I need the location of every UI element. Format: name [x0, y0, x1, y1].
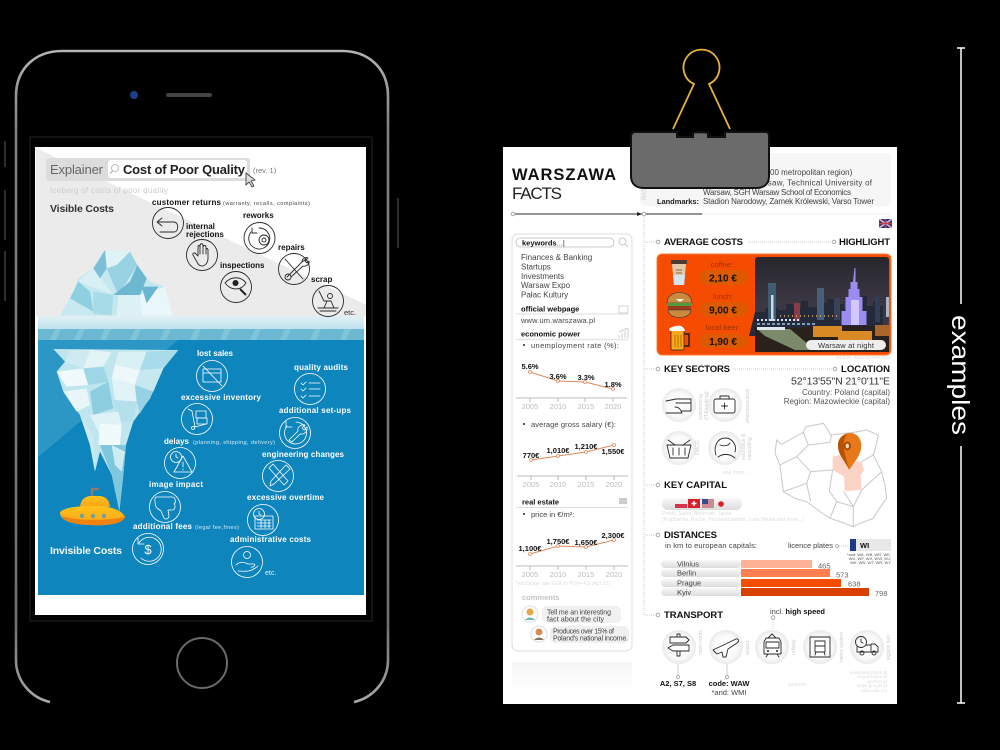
icon: delays — [164, 448, 196, 478]
row: berlin — [661, 568, 849, 580]
sources label: sources: — [788, 682, 807, 688]
coffee price: coffee: — [711, 260, 733, 269]
keyword list: Investments — [521, 272, 564, 281]
header bar — [46, 158, 250, 181]
icon: excessive overtime — [248, 504, 278, 536]
chart: unemployment rate: 3.3% — [577, 373, 595, 382]
icon: metro system — [803, 630, 837, 664]
chart: average gross salary: 1,210€ — [575, 442, 598, 451]
chart: unemployment rate: 1.8% — [604, 380, 622, 389]
heading: distances — [645, 530, 757, 550]
comment one: Tell me an interesting — [547, 610, 611, 616]
basic info panel: Stadion Narodowy, Zamek Królewski, Varso Tower — [703, 197, 874, 206]
title — [512, 166, 616, 203]
flags pill — [662, 498, 742, 510]
screen bezel — [30, 137, 372, 621]
chart: average gross salary — [517, 420, 628, 489]
heading: average costs: AVERAGE COSTS — [664, 237, 743, 248]
photo source: source: www.pexels.com — [836, 355, 891, 361]
roads value: A2, S7, S8 — [660, 679, 696, 688]
label: additional set-ups: additional set-ups — [279, 406, 352, 415]
heading: average costs — [645, 237, 836, 248]
revision note: (rev. 1) — [253, 166, 277, 175]
icon: additional fees — [132, 534, 164, 564]
phone mockup — [5, 51, 398, 702]
capital notes: (Polpharma, Roche, Procter&Gamble, Lotte Wedel and more...) — [662, 517, 804, 523]
label: lost sales: lost sales — [197, 349, 234, 358]
icon: coffee cup — [671, 260, 687, 285]
chart: average gross salary: 2020 — [606, 480, 622, 489]
label: main roads: main roads — [698, 630, 704, 655]
airport value — [709, 679, 750, 697]
photo: warsaw at night — [749, 257, 889, 352]
chart: price per square metre: 2020 — [606, 570, 622, 579]
comment two: Poland's national income. — [553, 636, 628, 642]
source list: bankier.pl — [868, 679, 887, 684]
label: insurance: insurance & — [741, 433, 747, 460]
label: insurance: consulting — [747, 437, 753, 460]
label: additional fees: additional fees — [133, 522, 193, 531]
keyword list: Pałac Kultury — [521, 290, 568, 300]
licence plates: WU, WF, WH, WW, WJ, — [849, 556, 891, 561]
label: repairs: repairs — [278, 243, 305, 252]
icon: airport — [709, 630, 743, 664]
palace of culture — [842, 268, 866, 325]
label: logistic hub: logistic hub — [886, 635, 892, 660]
licence plates: WI — [860, 541, 869, 550]
chart: average gross salary: 770€ — [523, 451, 540, 460]
label: outsourcing: (IT&banking) — [704, 391, 710, 420]
chart: price per square metre: 1,100€ — [519, 544, 542, 553]
binder clip — [631, 50, 769, 188]
lunch price — [700, 292, 747, 317]
comment one — [522, 606, 621, 624]
chart: unemployment rate: 2010 — [550, 402, 566, 411]
label: invisible costs: Invisible Costs — [50, 545, 122, 557]
airport value: code: WAW — [709, 679, 750, 688]
label: reworks: reworks — [243, 211, 274, 220]
chart: average gross salary: 1,010€ — [547, 446, 570, 455]
icon: pharmaceutical — [708, 388, 742, 422]
exchange rate footnote: *exchange rate EUR to PLN= 4,5 (Apr 22) — [516, 581, 610, 587]
chart: average gross salary: 2010 — [550, 480, 566, 489]
iceberg above water — [60, 250, 173, 316]
icon: additional set-ups — [280, 418, 310, 448]
note: additional fees: (legal fee,fines) — [195, 525, 239, 531]
home button — [177, 638, 227, 688]
chart: average gross salary: 2005 — [523, 480, 539, 489]
panel: average costs — [657, 254, 891, 355]
chart: price per square metre: price in €/m²: — [531, 510, 574, 519]
label: engineering changes: engineering changes — [262, 450, 345, 459]
coffee price: 2,10 € — [709, 274, 737, 284]
icon: image impact — [150, 492, 180, 522]
speaker — [168, 93, 210, 97]
chart: price per square metre: 2,300€ — [602, 531, 625, 540]
icon: burger — [667, 292, 692, 318]
row: vilnius: 465 — [818, 562, 831, 570]
chart: average gross salary: 1,550€ — [602, 447, 625, 456]
icon: beer mug — [669, 326, 689, 350]
icon: logistic hub — [850, 630, 884, 664]
chart: unemployment rate: 2015 — [578, 402, 594, 411]
official webpage: official webpage — [521, 304, 579, 314]
basic info panel: University of Warsaw, Technical University of — [703, 178, 873, 188]
faint lower box — [512, 662, 632, 690]
panel: location — [784, 364, 890, 406]
heading: distances: DISTANCES — [664, 530, 717, 541]
chart: price per square metre: 1,650€ — [575, 538, 598, 547]
label: outsourcing: outsourcing — [698, 394, 704, 420]
panel: warszawa facts sheet — [503, 147, 897, 704]
beer price: local beer: — [706, 323, 740, 332]
heading: highlight: HIGHLIGHT — [839, 237, 890, 248]
clip body — [631, 132, 769, 188]
icon: outsourcing — [662, 388, 696, 422]
side label: examples — [946, 48, 974, 703]
icon: additional fees: $ — [144, 542, 152, 557]
label: quality audits: quality audits — [294, 363, 349, 372]
side buttons — [5, 141, 398, 301]
search bar: keywords...| — [522, 238, 565, 248]
label: metro system: metro system — [839, 632, 845, 662]
keyword list: Startups — [521, 262, 551, 272]
title: FACTS — [512, 184, 562, 203]
label: excessive overtime: excessive overtime — [247, 493, 325, 502]
icon: customer returns — [152, 208, 184, 238]
submarine — [60, 489, 125, 525]
row: kyiv: Kyiv — [677, 588, 691, 597]
high speed note: incl. high speed — [770, 607, 825, 616]
airport value: *and: WMI — [711, 688, 747, 697]
lunch price: 9,00 € — [709, 306, 737, 316]
licence plates: *and: WA, WB, WD, WE, — [847, 552, 891, 557]
capital notes — [662, 511, 804, 523]
label: administrative costs: administrative costs — [230, 535, 312, 544]
icon: engineering changes — [262, 460, 294, 492]
beer price: 1,90 € — [709, 337, 737, 348]
row: prague: 638 — [848, 580, 861, 588]
chart: price per square metre: 2005 — [522, 570, 538, 579]
icon: administrative costs — [232, 546, 262, 578]
icon: reworks — [244, 222, 275, 254]
icon: fmcg basket — [662, 431, 696, 465]
label: fmcg: FMCG — [695, 440, 701, 455]
panel: location: Region: Mazowieckie (capital) — [784, 397, 890, 406]
icon: lost sales — [196, 360, 228, 392]
real estate heading: real estate — [522, 498, 559, 506]
note: customer returns: (warranty, recalls, complaints) — [223, 201, 310, 207]
label: delays: delays — [164, 437, 190, 446]
connector: airport — [726, 664, 728, 678]
licence plates: WK, WN, WT, WR, WY — [850, 560, 891, 565]
chart: price per square metre: 2010 — [550, 570, 566, 579]
row: prague: Prague — [677, 578, 701, 588]
chart: unemployment rate: 2005 — [522, 402, 538, 411]
row: vilnius: Vilnius — [677, 560, 699, 568]
basic info panel: 00 metropolitan region) — [770, 168, 853, 177]
panel: location: Country: Poland (capital) — [802, 388, 890, 397]
icon: railway — [755, 630, 789, 664]
panel: left column — [512, 234, 632, 651]
label: pharmaceutical: pharmaceutical — [745, 389, 751, 423]
label: airport: airport — [745, 640, 751, 655]
location pin — [838, 433, 861, 470]
icon: excessive inventory — [182, 404, 212, 434]
water surface — [38, 316, 364, 329]
official webpage — [516, 304, 628, 325]
visible costs background — [36, 148, 366, 316]
chart: unemployment rate — [516, 341, 627, 411]
comment two: Produces over 15% of — [553, 628, 614, 636]
row: kyiv — [661, 588, 888, 598]
lunch price: lunch: — [713, 292, 733, 301]
chart: price per square metre: 1,750€ — [547, 537, 570, 546]
panel: iceberg explainer screen — [35, 147, 366, 615]
chart: average gross salary: average gross salary (€): — [531, 420, 616, 429]
and more note: and more... — [723, 470, 748, 476]
chart: price per square metre: 2015 — [578, 570, 594, 579]
subtitle: Iceberg of costs of poor quality — [50, 186, 168, 195]
water stripes band — [38, 329, 364, 340]
chart: unemployment rate: 3.6% — [549, 372, 567, 381]
icon: quality audits — [294, 374, 326, 404]
clip wire — [673, 50, 730, 129]
etc visible: etc. — [344, 308, 356, 317]
source list: wikipedia.org — [861, 688, 887, 693]
heading: key capital: KEY CAPITAL — [664, 480, 727, 491]
chart: unemployment rate: 2020 — [605, 402, 621, 411]
label: customer returns: customer returns — [152, 198, 222, 207]
economic power heading: economic power — [521, 330, 580, 338]
source list: polskawliczbach.pl — [850, 670, 887, 675]
panel: location: 52°13'55"N 21°0'11"E — [791, 376, 890, 388]
icon: inspections — [220, 272, 252, 302]
mazowieckie region — [833, 455, 864, 491]
high speed note — [770, 607, 825, 629]
economic power heading — [516, 328, 628, 340]
icon: internal rejections — [186, 240, 218, 270]
heading: key sectors: KEY SECTORS — [664, 364, 730, 375]
label: excessive inventory: excessive inventory — [181, 393, 262, 402]
cursor — [246, 173, 255, 187]
title: WARSZAWA — [512, 166, 616, 184]
licence plates: licence plates — [788, 541, 833, 550]
map: poland — [775, 423, 887, 527]
city lights — [757, 319, 800, 321]
coffee price — [700, 260, 747, 285]
photo caption: Warsaw at night — [818, 341, 875, 350]
label: internal rejections: rejections — [186, 230, 224, 239]
source list — [850, 670, 887, 693]
beer price — [700, 323, 747, 348]
panel: location: LOCATION — [841, 364, 890, 375]
comment two — [531, 626, 629, 643]
camera — [130, 91, 138, 99]
basic info panel: Warsaw, SGH Warsaw School of Economics — [703, 188, 851, 197]
row: berlin: 573 — [836, 570, 849, 580]
basic info panel — [640, 153, 891, 206]
heading: distances: in km to european capitals: — [665, 541, 757, 550]
source list: wspolrzedne.pl — [857, 674, 887, 679]
keyword list — [521, 253, 592, 300]
icon: insurance and consulting — [708, 431, 742, 465]
icon: main roads — [662, 630, 696, 664]
comment one: fact about the city — [547, 616, 604, 624]
etc invisible: etc. — [265, 570, 276, 577]
header bar: Explainer — [50, 162, 104, 177]
label: railway: railway — [791, 639, 797, 655]
header bar: Cost of Poor Quality — [123, 162, 246, 177]
official webpage: www.um.warszawa.pl — [520, 316, 595, 325]
licence plates — [788, 539, 891, 565]
basic info panel: BASIC — [642, 181, 648, 200]
chart: average gross salary: 2015 — [578, 480, 594, 489]
note: delays: (planning, shipping, delivery) — [193, 440, 275, 446]
iceberg below water — [53, 349, 178, 512]
label: inspections: inspections — [220, 261, 265, 270]
heading: visible costs: Visible Costs — [50, 203, 114, 215]
icon: repairs — [278, 254, 310, 284]
vertical dotted connector — [643, 216, 645, 615]
keyword list: Finances & Banking — [521, 253, 592, 262]
keyword list: Warsaw Expo — [521, 281, 571, 290]
heading: key sectors — [645, 364, 837, 375]
icon: uk flag — [879, 219, 892, 228]
chart: unemployment rate: unemployment rate (%): — [531, 341, 619, 350]
row: prague — [661, 578, 861, 588]
label: scrap: scrap — [311, 275, 332, 284]
phone frame — [16, 51, 388, 702]
heading: transport: TRANSPORT — [664, 610, 723, 621]
underwater background — [38, 340, 364, 595]
connector: main roads — [676, 664, 680, 678]
capital notes: Polish, Swiss, American, Japan — [662, 511, 732, 517]
row: vilnius — [661, 560, 831, 570]
source list: maps.google.pl — [856, 683, 887, 688]
chart: unemployment rate: 5.6% — [521, 362, 539, 371]
underwater light diagonal — [38, 340, 178, 457]
label: image impact: image impact — [149, 480, 203, 489]
icon: scrap — [312, 286, 344, 316]
basic info panel: Landmarks: — [657, 197, 699, 206]
search bar — [516, 238, 628, 248]
row: kyiv: 798 — [875, 589, 888, 598]
label: internal rejections: internal — [186, 222, 215, 231]
row: berlin: Berlin — [677, 568, 696, 578]
timeline — [511, 212, 890, 216]
chart: price per square metre — [516, 510, 628, 579]
side label: examples: examples — [946, 315, 974, 435]
real estate heading — [516, 498, 628, 508]
bar chart: distances — [661, 560, 888, 598]
comments heading: comments — [522, 593, 560, 602]
